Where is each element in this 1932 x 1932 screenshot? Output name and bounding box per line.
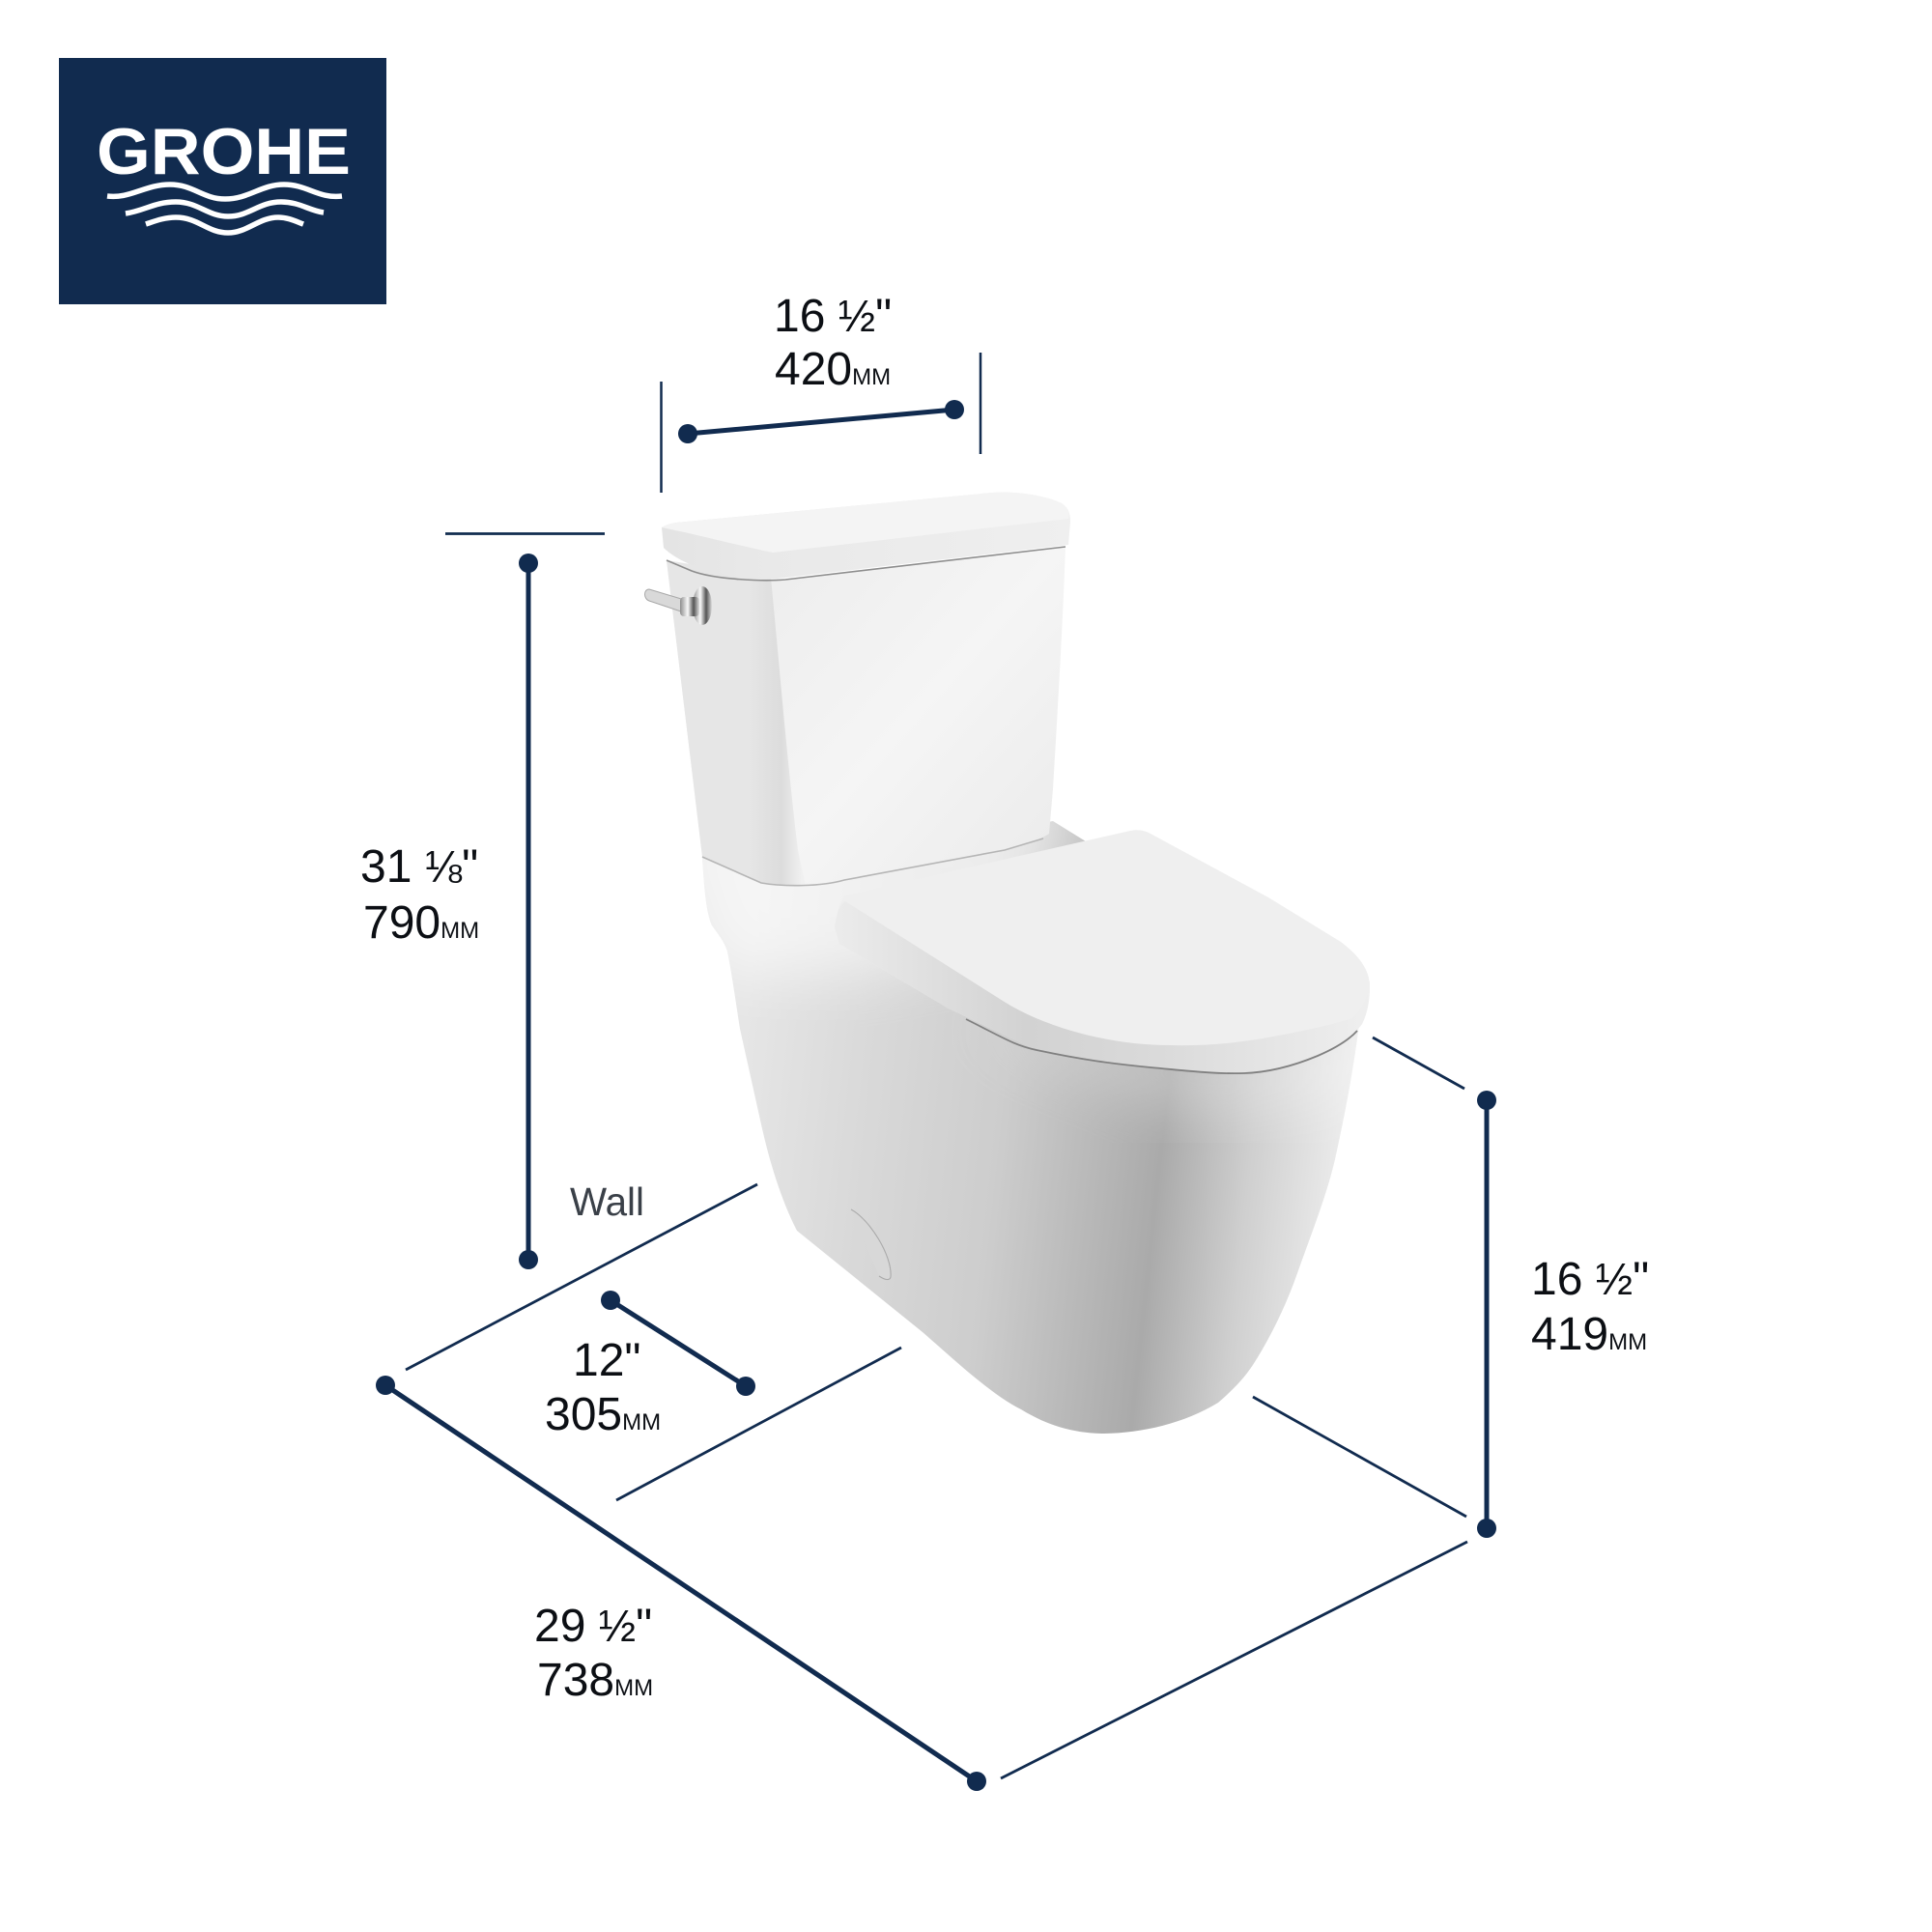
flush lever [645,586,712,625]
logo wordmark: GROHE [97,115,351,188]
measure line [376,1376,986,1791]
label 31 1/8 inch 790 mm: 790MM [363,897,479,949]
label 16 1/2 inch 419 mm: 419MM [1531,1309,1647,1360]
dimension: overall depth [376,1376,986,1791]
seat lid [835,830,1370,1073]
seat side band [835,901,1370,1073]
measure line [519,554,538,1269]
dimension: seat height [1001,1037,1649,1778]
wall line [406,1184,757,1370]
label 29 1/2 inch 738 mm [534,1601,653,1706]
label 12 inch 305 mm: 12" [573,1335,640,1386]
label 12 inch 305 mm [545,1335,661,1440]
label 16 1/2 inch 420 mm [774,291,892,395]
toilet illustration [645,493,1391,1434]
label 29 1/2 inch 738 mm: 738MM [537,1655,653,1706]
dimension: overall height [360,533,605,1269]
waste cap on bowl side [851,1209,891,1280]
dimension: rough-in [545,1291,901,1500]
dimension: tank width [661,291,980,493]
wall label: Wall [570,1179,644,1224]
label 31 1/8 inch 790 mm: 31 ⅛" [360,841,478,893]
extension lines [1001,1037,1467,1778]
rough-in reference line [616,1348,901,1500]
label 16 1/2 inch 419 mm: 16 ½" [1531,1254,1649,1305]
extension lines [661,353,980,493]
tank side face [667,560,806,886]
label 16 1/2 inch 420 mm: 16 ½" [774,291,892,342]
label 29 1/2 inch 738 mm: 29 ½" [534,1601,652,1652]
seat underside shadow [966,1019,1357,1073]
top reference line [445,532,605,535]
label 31 1/8 inch 790 mm [360,841,479,949]
measure line [678,400,964,443]
tank body [667,547,1065,887]
label 16 1/2 inch 420 mm: 420MM [775,344,891,395]
measure line [601,1291,755,1396]
logo: GROHE [59,58,386,304]
label 12 inch 305 mm: 305MM [545,1389,661,1440]
label 16 1/2 inch 419 mm [1531,1254,1649,1360]
toilet bowl and base [702,821,1358,1434]
tank lid [662,493,1070,581]
logo waves [107,185,342,233]
measure line [1477,1091,1496,1538]
